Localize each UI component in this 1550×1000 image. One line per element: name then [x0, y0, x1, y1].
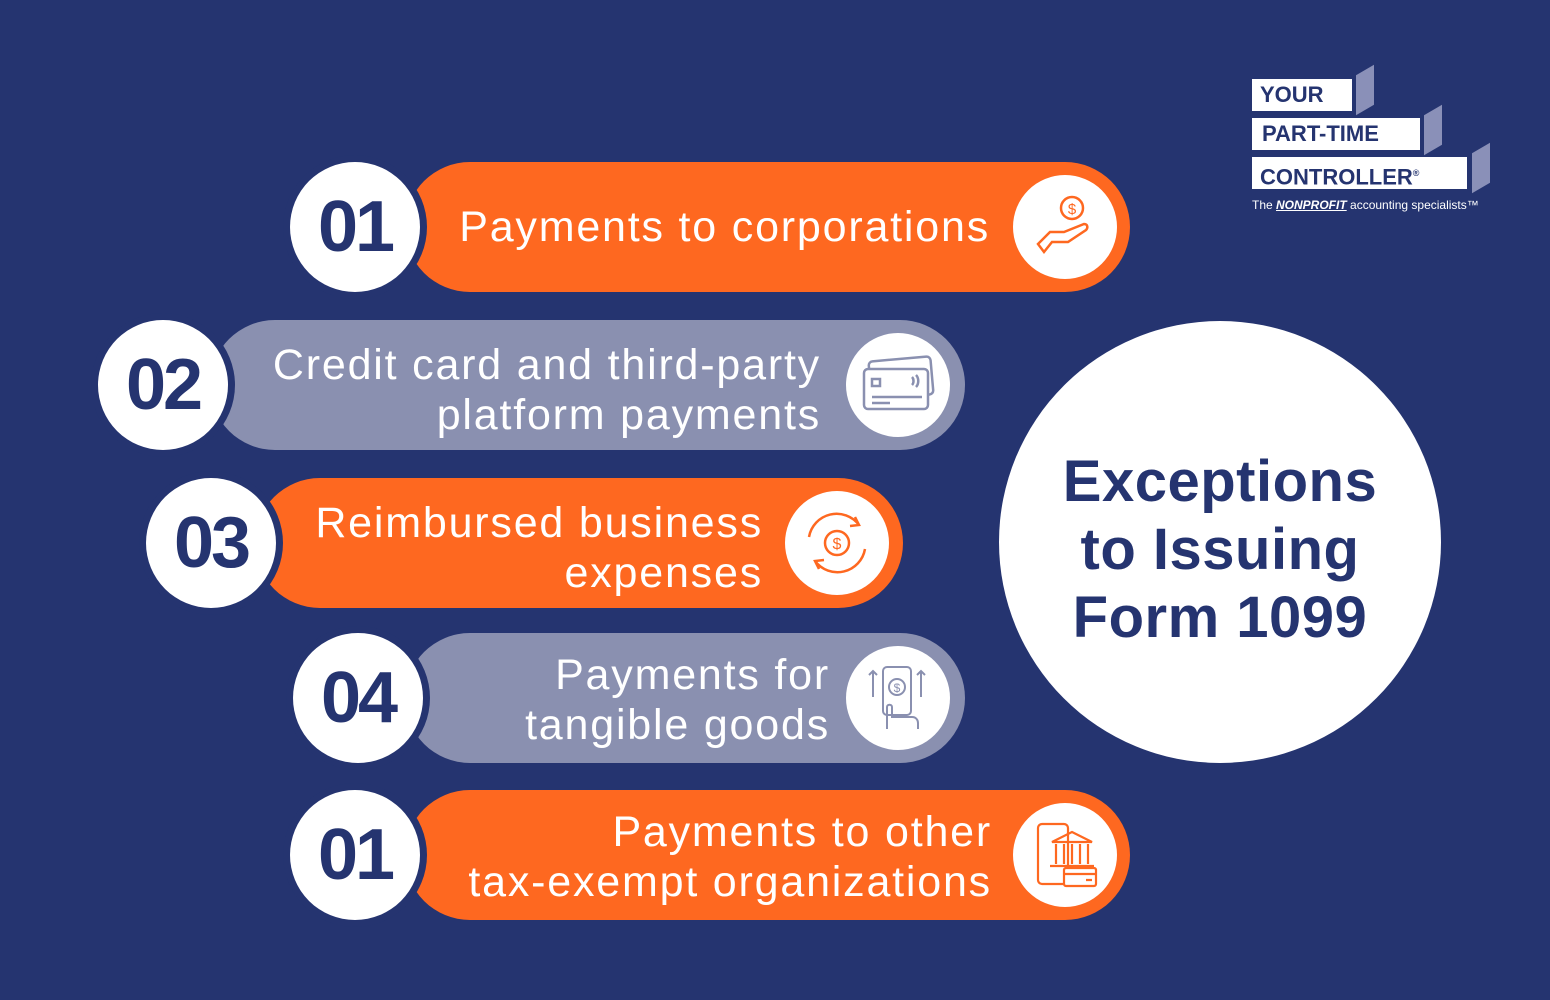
text: $ — [894, 681, 901, 695]
text: 04 — [321, 658, 395, 738]
logo: YOUR — [1260, 82, 1324, 107]
logo: The NONPROFIT accounting specialists™ — [1252, 198, 1479, 212]
row 1 — [290, 162, 1130, 292]
title circle — [999, 321, 1441, 763]
text: Reimbursed business — [315, 499, 763, 547]
text: Payments to other — [612, 808, 992, 856]
text: tangible goods — [525, 701, 830, 749]
text: 01 — [318, 815, 392, 895]
title circle: to Issuing — [1081, 517, 1359, 582]
text: expenses — [565, 549, 763, 597]
logo — [1252, 64, 1490, 212]
row 5 — [290, 790, 1130, 920]
text: tax-exempt organizations — [468, 858, 992, 906]
text: 02 — [126, 345, 200, 425]
title circle: Exceptions — [1063, 449, 1377, 514]
text: $ — [1068, 201, 1077, 218]
text: $ — [833, 536, 842, 553]
title circle: Form 1099 — [1073, 585, 1367, 650]
text: 03 — [174, 503, 248, 583]
logo: CONTROLLER® — [1260, 164, 1419, 189]
text: platform payments — [437, 391, 821, 439]
row 4 — [293, 633, 965, 763]
text: Credit card and third-party — [273, 341, 821, 389]
row 2 — [98, 320, 965, 450]
text: Payments for — [555, 651, 830, 699]
logo: PART-TIME — [1262, 121, 1379, 146]
text: 01 — [318, 187, 392, 267]
row 3 — [146, 478, 903, 608]
text: Payments to corporations — [459, 203, 990, 251]
